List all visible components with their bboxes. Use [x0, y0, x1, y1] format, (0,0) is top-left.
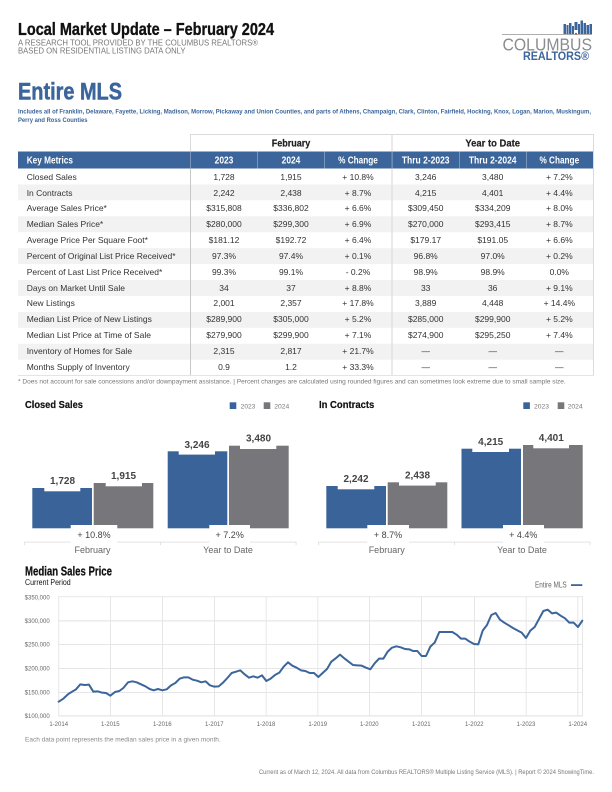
column: Thru 2-2023: $274,900 — [408, 330, 444, 340]
heading: Entire MLS: Entire MLS — [18, 78, 122, 105]
x axis labels: 1-2015 — [101, 722, 120, 728]
category labels: Year to Date — [203, 545, 253, 555]
x axis labels: 1-2019 — [308, 722, 328, 728]
column: Thru 2-2023: $179.17 — [410, 235, 441, 245]
heading: closed sales: Closed Sales — [25, 399, 83, 411]
column: year to date percent change: + 0.2% — [546, 251, 573, 261]
column: Thru 2-2024: — — [488, 362, 497, 372]
column: February percent change — [342, 172, 374, 372]
data line — [59, 610, 582, 702]
metric names: Months Supply of Inventory — [27, 362, 130, 372]
column: year to date percent change: + 9.1% — [546, 283, 573, 293]
category labels: February — [74, 545, 111, 555]
column: February percent change: + 6.9% — [345, 219, 372, 229]
area description — [18, 108, 591, 124]
metric names: In Contracts — [27, 188, 73, 198]
category labels: February — [369, 545, 405, 555]
column: February 2023: $181.12 — [209, 235, 240, 245]
column: year to date percent change: — — [555, 362, 564, 372]
legend: 2023 — [534, 404, 549, 410]
column: February percent change: + 0.1% — [345, 251, 372, 261]
column: year to date percent change: 0.0% — [550, 267, 569, 277]
group headers: February — [272, 138, 310, 150]
column: year to date percent change: + 4.4% — [546, 188, 573, 198]
x axis labels: 1-2018 — [257, 722, 276, 728]
category labels: Year to Date — [497, 545, 547, 555]
column: year to date percent change: + 8.7% — [546, 219, 573, 229]
subtitle: A RESEARCH TOOL PROVIDED BY THE COLUMBUS REALTORS® — [18, 39, 258, 48]
category labels — [369, 545, 547, 555]
x axis labels: 1-2014 — [49, 722, 69, 728]
column: February 2023: $315,808 — [206, 203, 242, 213]
column: Thru 2-2023: $309,450 — [408, 203, 444, 213]
line legend: Entire MLS — [535, 581, 567, 590]
column: Thru 2-2023: — — [421, 346, 430, 356]
legend: 2024 — [274, 404, 290, 410]
percent change labels: + 8.7% — [374, 530, 402, 540]
axis — [24, 542, 297, 545]
metric names: New Listings — [27, 298, 75, 308]
page header — [18, 19, 274, 56]
value labels: 3,480 — [246, 434, 271, 445]
axis — [318, 542, 590, 545]
value labels: 4,215 — [478, 437, 504, 448]
column: February percent change: + 8.7% — [345, 188, 372, 198]
column: year to date percent change: + 14.4% — [544, 298, 575, 308]
column: February percent change: + 5.2% — [345, 314, 372, 324]
column: Thru 2-2024: $334,209 — [475, 203, 511, 213]
value labels: 4,401 — [539, 433, 564, 444]
column: February 2024: $192.72 — [276, 235, 307, 245]
column: February 2024: 99.1% — [279, 267, 303, 277]
column: year to date percent change — [544, 172, 575, 372]
value labels: 1,915 — [111, 471, 136, 482]
x axis labels — [49, 722, 588, 728]
x axis labels: 1-2017 — [205, 722, 224, 728]
column: February percent change: + 6.4% — [345, 235, 372, 245]
grid — [58, 596, 583, 716]
x axis labels: 1-2024 — [568, 722, 588, 728]
title: Local Market Update – February 2024 — [18, 19, 274, 39]
column: February 2024: 1,915 — [280, 172, 302, 182]
metric names: Inventory of Homes for Sale — [27, 346, 132, 356]
metric names: Closed Sales — [27, 172, 77, 182]
column: February 2023: 0.9 — [218, 362, 230, 372]
column: February 2024: $336,802 — [273, 203, 309, 213]
metric names: Days on Market Until Sale — [27, 283, 125, 293]
y axis labels: $150,000 — [25, 690, 50, 696]
metric names: Percent of Last List Price Received* — [27, 267, 163, 277]
subtitle: BASED ON RESIDENTIAL LISTING DATA ONLY — [18, 47, 186, 56]
metric names: Median List Price of New Listings — [27, 314, 152, 324]
column: February 2024: 2,817 — [280, 346, 302, 356]
column: Thru 2-2024: 4,401 — [482, 188, 504, 198]
category labels — [74, 545, 253, 555]
column: February 2023: 2,242 — [213, 188, 235, 198]
x axis labels: 1-2020 — [360, 722, 379, 728]
bars — [326, 444, 583, 545]
area description: Perry and Ross Counties — [18, 117, 88, 124]
percent change labels — [374, 530, 537, 540]
key metrics table — [18, 134, 594, 376]
y axis labels — [25, 595, 50, 720]
legend: 2024 — [568, 404, 583, 410]
column: Thru 2-2024: $293,415 — [475, 219, 511, 229]
column: February 2024: $299,900 — [273, 330, 309, 340]
x axis labels: 1-2022 — [465, 722, 484, 728]
column: Thru 2-2023: 3,246 — [415, 172, 437, 182]
x axis labels: 1-2023 — [517, 722, 536, 728]
header row: Thru 2-2023 — [402, 154, 450, 166]
metric names: Median List Price at Time of Sale — [27, 330, 151, 340]
metric names: Average Sales Price* — [27, 203, 108, 213]
y axis labels: $200,000 — [25, 666, 50, 672]
y axis labels: $250,000 — [25, 642, 50, 648]
page footer: Current as of March 12, 2024. All data from Columbus REALTORS® Multiple Listing Service (MLS). | Report © 2024 ShowingTime. — [259, 769, 594, 776]
column: February 2024: 97.4% — [279, 251, 303, 261]
column: February 2024: 1.2 — [285, 362, 297, 372]
heading: in contracts: In Contracts — [319, 399, 374, 411]
column: Thru 2-2024: 98.9% — [481, 267, 505, 277]
legend: 2023 — [241, 404, 256, 410]
x axis labels: 1-2021 — [412, 722, 431, 728]
metric names — [27, 172, 176, 372]
column: year to date percent change: + 7.4% — [546, 330, 573, 340]
header row: Key Metrics — [27, 154, 73, 166]
group headers: Year to Date — [465, 138, 520, 150]
column: February 2023: $279,900 — [206, 330, 242, 340]
metric names: Percent of Original List Price Received* — [27, 251, 176, 261]
value labels: 2,242 — [343, 474, 369, 485]
y axis labels: $350,000 — [25, 595, 50, 601]
bars — [32, 445, 289, 545]
value labels: 3,246 — [184, 440, 210, 451]
column: Thru 2-2023: 4,215 — [415, 188, 437, 198]
header row: % Change — [539, 154, 579, 166]
column: Thru 2-2023: 3,889 — [415, 298, 437, 308]
column: February 2024: $299,300 — [273, 219, 309, 229]
header row: 2023 — [215, 154, 233, 166]
column: Thru 2-2023: 96.8% — [414, 251, 438, 261]
column: February 2023: 97.3% — [212, 251, 236, 261]
header row: % Change — [338, 154, 378, 166]
column: Thru 2-2024: 3,480 — [482, 172, 504, 182]
column: February 2023: 34 — [219, 283, 229, 293]
metric names: Average Price Per Square Foot* — [27, 235, 149, 245]
column: February percent change: + 7.1% — [345, 330, 372, 340]
column: Thru 2-2024 — [475, 172, 511, 372]
header row — [18, 152, 594, 168]
legend — [523, 402, 583, 410]
logo: Columbus Realtors: COLUMBUS — [502, 35, 592, 55]
row shading — [18, 184, 593, 360]
heading: median sales price: Median Sales Price — [25, 565, 112, 579]
panel: in contracts chart — [318, 399, 590, 555]
column: Thru 2-2024: $299,900 — [475, 314, 511, 324]
column: February percent change: + 21.7% — [342, 346, 374, 356]
column: February 2024 — [273, 172, 309, 372]
column: February percent change: + 17.8% — [342, 298, 374, 308]
column: February 2023: 2,315 — [213, 346, 235, 356]
column: February 2024: 2,357 — [280, 298, 302, 308]
subtitle — [18, 39, 258, 56]
column: Thru 2-2023: $270,000 — [408, 219, 444, 229]
column: Thru 2-2023: $285,000 — [408, 314, 444, 324]
column: February 2023: 99.3% — [212, 267, 236, 277]
column: year to date percent change: + 5.2% — [546, 314, 573, 324]
percent change labels: + 7.2% — [216, 530, 244, 540]
chart note: Each data point represents the median sales price in a given month. — [25, 737, 221, 744]
panel: closed sales chart — [24, 399, 297, 555]
column: February percent change: + 10.8% — [342, 172, 374, 182]
column: Thru 2-2024: $295,250 — [475, 330, 511, 340]
column: February percent change: - 0.2% — [346, 267, 371, 277]
column: February 2023: 1,728 — [213, 172, 235, 182]
value labels: 2,438 — [405, 471, 430, 482]
table borders — [18, 134, 594, 376]
column: February 2024: $305,000 — [273, 314, 309, 324]
subheading: current period: Current Period — [25, 577, 71, 587]
x axis labels: 1-2016 — [153, 722, 172, 728]
column: year to date percent change: + 6.6% — [546, 235, 573, 245]
value labels: 1,728 — [50, 476, 75, 487]
header row: Thru 2-2024 — [469, 154, 517, 166]
column: year to date percent change: + 8.0% — [546, 203, 573, 213]
y axis labels: $300,000 — [25, 619, 50, 625]
logo: Columbus Realtors — [502, 20, 592, 63]
column: February 2023 — [206, 172, 242, 372]
column: February 2024: 37 — [286, 283, 296, 293]
percent change labels: + 10.8% — [77, 530, 111, 540]
column: Thru 2-2024: 97.0% — [481, 251, 505, 261]
value labels — [50, 434, 271, 487]
column: Thru 2-2024: 36 — [488, 283, 498, 293]
column: Thru 2-2023 — [408, 172, 444, 372]
column: February 2023: 2,001 — [213, 298, 235, 308]
column: Thru 2-2023: 98.9% — [414, 267, 438, 277]
y axis labels: $100,000 — [25, 714, 50, 720]
column: Thru 2-2024: $191.05 — [477, 235, 508, 245]
metric names: Median Sales Price* — [27, 219, 104, 229]
panel: median sales price line chart — [25, 565, 588, 744]
column: February percent change: + 8.8% — [345, 283, 372, 293]
value labels — [343, 433, 564, 485]
column: Thru 2-2023: 33 — [421, 283, 431, 293]
percent change labels — [77, 530, 244, 540]
logo: Columbus Realtors: REALTORS® — [523, 51, 589, 63]
column: February percent change: + 33.3% — [342, 362, 374, 372]
column: February 2023: $280,000 — [206, 219, 242, 229]
group headers — [272, 138, 520, 150]
column: February percent change: + 6.6% — [345, 203, 372, 213]
column: Thru 2-2024: 4,448 — [482, 298, 504, 308]
table footnote: * Does not account for sale concessions and/or downpayment assistance. | Percent changes are calculated using rounded figures and can sometimes look extreme due to small sample size. — [18, 378, 566, 386]
column: February 2023: $289,900 — [206, 314, 242, 324]
percent change labels: + 4.4% — [509, 530, 537, 540]
column: February 2024: 2,438 — [280, 188, 302, 198]
column: Thru 2-2024: — — [488, 346, 497, 356]
column: year to date percent change: — — [555, 346, 564, 356]
header row: 2024 — [282, 154, 300, 166]
column: year to date percent change: + 7.2% — [546, 172, 573, 182]
legend — [230, 402, 290, 410]
column: Thru 2-2023: — — [421, 362, 430, 372]
